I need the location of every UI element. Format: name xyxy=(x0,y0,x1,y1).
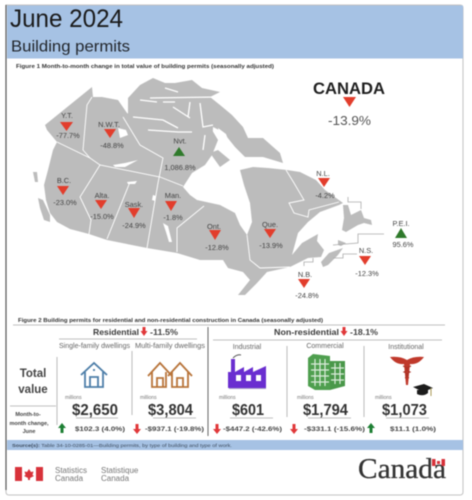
value: commercial: millions xyxy=(297,395,314,401)
change: multi-family xyxy=(133,424,204,434)
icon: factory xyxy=(228,355,266,388)
marker: Quebec: -13.9% xyxy=(259,241,283,250)
value: industrial: $601 xyxy=(232,402,264,419)
heading: non-residential xyxy=(274,327,378,337)
marker: Nova Scotia: N.S. xyxy=(359,246,373,255)
marker: Yukon xyxy=(56,111,80,140)
value: institutional xyxy=(375,395,427,419)
heading: residential: Residential xyxy=(93,327,139,337)
source bar xyxy=(7,440,463,450)
marker: British Columbia: B.C. xyxy=(57,176,71,185)
marker: Quebec: Que. xyxy=(262,220,278,229)
icon: office buildings xyxy=(308,354,345,390)
marker: Prince Edward Island: 95.6% xyxy=(393,240,414,249)
value: multi-family: $3,804 xyxy=(148,402,193,419)
marker: Nunavut xyxy=(164,136,196,172)
row label: month-to-month change: month change, xyxy=(9,421,49,427)
logo: Statistics Canada flag xyxy=(15,467,43,481)
marker: Nunavut: Nvt. xyxy=(173,136,187,146)
column header: single-family: Single-family dwellings xyxy=(59,343,130,350)
Canada total: CANADA xyxy=(313,79,385,98)
marker: Ontario xyxy=(205,222,229,252)
change: industrial xyxy=(213,424,282,434)
header banner xyxy=(7,5,463,58)
column header: commercial: Commercial xyxy=(306,343,344,350)
change: single-family: $102.3 (4.0%) xyxy=(75,426,125,433)
subtitle: Building permits xyxy=(11,38,130,56)
logo: Statistics Canada wordmark: Statistique xyxy=(101,466,139,475)
marker: Northwest Territories: N.W.T. xyxy=(98,120,120,129)
marker: Prince Edward Island: P.E.I. xyxy=(392,219,410,228)
marker: Newfoundland and Labrador: -4.2% xyxy=(315,191,335,200)
marker: Nova Scotia xyxy=(355,246,379,278)
logo: Statistics Canada wordmark xyxy=(55,466,139,483)
Canada total: -13.9% xyxy=(328,113,371,128)
column header: institutional: Institutional xyxy=(388,344,424,351)
title: June 2024 xyxy=(10,5,123,33)
icon: caduceus and graduation cap xyxy=(390,357,433,396)
marker: Yukon: -77.7% xyxy=(56,131,80,140)
marker: Quebec xyxy=(259,220,283,250)
marker: Prince Edward Island xyxy=(392,219,414,249)
change: industrial: -$447.2 (-42.6%) xyxy=(223,426,282,433)
value: multi-family xyxy=(140,395,193,419)
map of Canada xyxy=(33,78,384,295)
change: institutional xyxy=(367,423,436,433)
marker: New Brunswick: N.B. xyxy=(298,270,312,279)
row label: total value: Total xyxy=(20,368,46,380)
value: single-family xyxy=(65,395,118,419)
value: institutional: $1,073 xyxy=(382,402,427,419)
icon: house xyxy=(81,363,107,387)
marker: Manitoba: -1.8% xyxy=(163,213,183,222)
change: commercial xyxy=(290,424,365,434)
marker: Ontario: Ont. xyxy=(207,222,221,231)
value: commercial xyxy=(297,395,348,419)
heading: residential: -11.5% xyxy=(150,328,178,337)
Canada total xyxy=(313,79,385,128)
marker: Nunavut: 1,086.8% xyxy=(164,163,196,172)
marker: Newfoundland and Labrador xyxy=(315,169,335,200)
marker: Newfoundland and Labrador: N.L. xyxy=(316,169,330,178)
value: industrial: millions xyxy=(219,395,236,401)
change: institutional: $11.1 (1.0%) xyxy=(390,426,436,433)
row label: month-to-month change: Month-to- xyxy=(15,412,41,418)
marker: Northwest Territories: -48.8% xyxy=(100,141,124,150)
value: single-family: $2,650 xyxy=(72,402,118,419)
marker: Alberta: -15.0% xyxy=(90,212,114,221)
column header: multi-family: Multi-family dwellings xyxy=(135,343,206,350)
column header: industrial: Industrial xyxy=(233,344,262,351)
figure 2 caption: Figure 2 Building permits for residential and non-residential construction in Canada (seasonally adjusted) xyxy=(18,318,323,324)
marker: British Columbia xyxy=(53,176,77,207)
value: commercial: $1,794 xyxy=(303,402,348,419)
change: multi-family: -$937.1 (-19.8%) xyxy=(145,426,204,433)
logo: Statistics Canada wordmark: Canada xyxy=(101,474,130,483)
marker: New Brunswick xyxy=(295,270,319,300)
marker: Ontario: -12.8% xyxy=(205,243,229,252)
source bar: Source(s): Table 34-10-0285-01—Building permits, by type of building and type of work. xyxy=(12,443,232,448)
logo: Statistics Canada wordmark: Statistics xyxy=(55,466,87,475)
marker: Manitoba: Man. xyxy=(165,191,181,200)
change: commercial: -$331.1 (-15.6%) xyxy=(304,426,365,433)
marker: Yukon: Y.T. xyxy=(61,111,73,120)
marker: New Brunswick: -24.8% xyxy=(295,291,319,300)
marker: Northwest Territories xyxy=(98,120,124,150)
change: single-family xyxy=(58,423,125,433)
marker: Nova Scotia: -12.3% xyxy=(355,269,379,278)
value: institutional: millions xyxy=(375,395,392,401)
heading: residential xyxy=(93,327,178,337)
value: single-family: millions xyxy=(65,395,82,401)
row label: month-to-month change xyxy=(9,412,49,435)
figure 1 caption: Figure 1 Month-to-month change in total value of building permits (seasonally adjusted) xyxy=(16,64,274,70)
marker: Saskatchewan xyxy=(122,200,146,230)
row label: total value xyxy=(18,368,48,396)
marker: Manitoba xyxy=(163,191,183,222)
marker: Saskatchewan: Sask. xyxy=(125,200,143,209)
heading: non-residential: Non-residential xyxy=(274,327,339,337)
value: multi-family: millions xyxy=(140,395,157,401)
value: industrial xyxy=(219,395,264,419)
row label: month-to-month change: June xyxy=(23,429,35,435)
logo: Canada wordmark: Canada xyxy=(358,453,446,485)
marker: Alberta: Alta. xyxy=(95,191,109,200)
icon: two houses xyxy=(148,363,192,387)
marker: Saskatchewan: -24.9% xyxy=(122,221,146,230)
heading: non-residential: -18.1% xyxy=(350,328,378,337)
marker: Alberta xyxy=(90,191,114,221)
row label: total value: value xyxy=(18,384,48,396)
logo: Statistics Canada wordmark: Canada xyxy=(55,474,84,483)
marker: British Columbia: -23.0% xyxy=(53,198,77,207)
